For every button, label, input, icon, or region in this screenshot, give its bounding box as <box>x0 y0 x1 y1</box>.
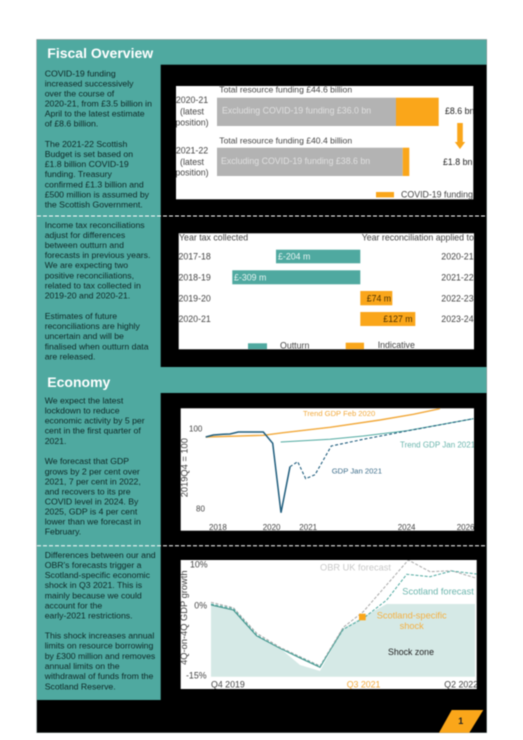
divider <box>37 215 485 217</box>
text block: income tax reconciliations: We are expecting two <box>45 260 128 270</box>
chart: income tax reconciliations: 2023-24 <box>441 314 474 324</box>
text block: GDP outlook: We forecast that GDP <box>45 456 129 466</box>
text block: COVID-19 funding: of £8.6 billion. <box>45 119 98 129</box>
text block: Scotland-specific shock: This shock increases annual <box>45 631 154 641</box>
text block: GDP outlook: grows by 2 per cent over <box>45 466 140 476</box>
arrow: down from 8.6 to 1.8 <box>455 123 465 149</box>
text block: GDP outlook: COVID level in 2024. By <box>45 496 139 506</box>
text block: GDP outlook: lockdown to reduce <box>45 405 120 415</box>
chart: income tax reconciliations: Indicative <box>378 340 415 350</box>
text block: COVID-19 funding: £500 million is assumed by <box>45 189 150 199</box>
chart: total resource funding bars: £1.8 bn <box>443 157 472 167</box>
chart: total resource funding bars: COVID-19 funding <box>401 190 473 200</box>
chart: total resource funding bars: position) <box>175 168 209 178</box>
text block: Scotland-specific shock: withdrawal of funds from the <box>44 671 154 681</box>
chart: total resource funding bars: 2020-21 <box>176 95 208 105</box>
chart: shock zone: Scotland-specific <box>377 610 447 620</box>
text block: income tax reconciliations: Estimates of future <box>45 311 117 321</box>
text block: COVID-19 funding: £1.8 billion COVID-19 <box>45 159 129 169</box>
chart: total resource funding bars: Excluding COVID-19 funding £36.0 bn <box>222 105 371 115</box>
chart: GDP lines: 80 <box>196 505 205 514</box>
chart: income tax reconciliations: £127 m <box>383 314 413 324</box>
chart: income tax reconciliations: 2021-22 <box>441 273 474 283</box>
text block: GDP outlook: 2025, GDP is 4 per cent <box>45 506 138 516</box>
text block: GDP outlook: February. <box>45 527 81 537</box>
chart: shock zone: 10% <box>190 559 208 569</box>
text block: income tax reconciliations: are released. <box>45 351 95 361</box>
chart: income tax reconciliations: Year reconciliation applied to <box>362 233 474 243</box>
chart: GDP lines: 2019Q4 = 100 <box>180 438 190 497</box>
chart: shock zone: Shock zone <box>388 647 434 657</box>
text block: Scotland-specific shock: by £300 million and removes <box>45 651 156 661</box>
chart: shock zone: -15% <box>186 670 207 680</box>
heading: Fiscal Overview: Fiscal Overview <box>47 45 153 61</box>
text block: Scotland-specific shock: limits on resource borrowing <box>45 641 154 651</box>
chart: income tax reconciliations <box>178 233 474 351</box>
text block: Scotland-specific shock: Differences between our and <box>45 550 156 560</box>
text block: COVID-19 funding: confirmed £1.3 billion and <box>45 179 144 189</box>
text block: Scotland-specific shock: shock in Q3 2021. This is <box>45 580 143 590</box>
text block: Scotland-specific shock: account for the <box>45 600 102 610</box>
chart: GDP lines: 2026 <box>457 523 475 532</box>
chart: income tax reconciliations: £-204 m <box>278 252 310 262</box>
chart: total resource funding bars: Total resource funding £40.4 billion <box>219 135 352 145</box>
text block: COVID-19 funding: COVID-19 funding <box>45 68 116 78</box>
text block: Scotland-specific shock: Scotland-specific economic <box>45 570 151 580</box>
chart: shock zone: shock <box>400 621 424 631</box>
chart: shock zone: Q3 2021 <box>347 680 381 690</box>
chart: income tax reconciliations: Outturn <box>280 341 309 351</box>
text block: Scotland-specific shock: Scotland Reserve. <box>45 681 116 691</box>
page number tab <box>439 710 483 733</box>
chart: total resource funding bars: position) <box>175 117 209 127</box>
chart: GDP lines: 2021 <box>299 523 318 532</box>
chart: total resource funding bars: £8.6 bn <box>445 106 474 116</box>
chart: total resource funding bars: 2021-22 <box>176 146 208 156</box>
text block: COVID-19 funding: funding. Treasury <box>45 169 112 179</box>
chart: GDP lines <box>180 408 476 532</box>
text block: Scotland-specific shock: early-2021 restrictions. <box>45 611 133 621</box>
text block: Scotland-specific shock <box>44 550 156 691</box>
text block: income tax reconciliations: forecasts in previous years. <box>45 250 150 260</box>
chart: shock zone: Q4 2019 <box>211 680 245 690</box>
chart: shock zone: 0% <box>194 601 207 611</box>
chart: GDP lines: Trend GDP Jan 2021 <box>400 441 476 450</box>
chart: shock zone: 4Q-on-4Q GDP growth <box>179 571 189 665</box>
text block: COVID-19 funding: increased successively <box>45 78 134 88</box>
chart: GDP lines: 2018 <box>209 523 227 532</box>
chart: shock zone: Q2 2022 <box>444 680 478 690</box>
text block: GDP outlook: 2021, 7 per cent in 2022, <box>45 476 141 486</box>
text block: income tax reconciliations: between outturn and <box>45 240 124 250</box>
text block: income tax reconciliations <box>45 220 150 361</box>
text block: Scotland-specific shock: mainly because we could <box>45 590 142 600</box>
text block: income tax reconciliations: positive reconciliations, <box>45 270 134 280</box>
text block: Scotland-specific shock: OBR's forecasts trigger a <box>45 560 142 570</box>
chart: GDP lines: GDP Jan 2021 <box>332 466 382 475</box>
chart: income tax reconciliations: 2019-20 <box>178 293 211 303</box>
chart: GDP lines: 2024 <box>398 523 416 532</box>
text block: COVID-19 funding: April to the latest estimate <box>45 109 145 119</box>
chart: income tax reconciliations: Year tax collected <box>179 233 248 243</box>
chart: GDP lines: 100 <box>189 425 203 434</box>
text block: COVID-19 funding <box>45 68 152 209</box>
text block: COVID-19 funding: over the course of <box>45 88 115 98</box>
chart: shock zone <box>179 559 478 690</box>
chart: income tax reconciliations: 2020-21 <box>178 314 211 324</box>
text block: income tax reconciliations: finalised when outturn data <box>45 341 149 351</box>
chart: shock zone: Scotland forecast <box>402 586 474 596</box>
text block: COVID-19 funding: The 2021-22 Scottish <box>45 139 127 149</box>
text block: GDP outlook: economic activity by 5 per <box>45 416 145 426</box>
chart: GDP lines: 2020 <box>263 523 281 532</box>
text block: COVID-19 funding: 2020-21, from £3.5 billion in <box>45 98 152 108</box>
chart: income tax reconciliations: £-309 m <box>234 273 266 283</box>
text block: COVID-19 funding: Budget is set based on <box>45 149 133 159</box>
text block: income tax reconciliations: adjust for differences <box>45 230 126 240</box>
text block: COVID-19 funding: the Scottish Government. <box>45 199 143 209</box>
chart: income tax reconciliations: £74 m <box>367 293 391 303</box>
chart: total resource funding bars: (latest <box>180 107 205 117</box>
chart: total resource funding bars <box>175 85 474 200</box>
chart: income tax reconciliations: 2022-23 <box>441 293 474 303</box>
text block: income tax reconciliations: related to tax collected in <box>45 281 141 291</box>
text block: income tax reconciliations: Income tax reconciliations <box>45 220 145 230</box>
divider <box>37 545 485 547</box>
chart: GDP lines: Trend GDP Feb 2020 <box>303 409 375 418</box>
chart: income tax reconciliations: 2018-19 <box>178 273 211 283</box>
text block: GDP outlook <box>45 395 145 537</box>
chart: total resource funding bars: (latest <box>180 157 205 167</box>
chart: income tax reconciliations: 2017-18 <box>178 252 211 262</box>
text block: income tax reconciliations: 2019-20 and 2020-21. <box>45 291 130 301</box>
text block: GDP outlook: We expect the latest <box>45 395 124 405</box>
text block: income tax reconciliations: uncertain and will be <box>45 331 124 341</box>
text block: GDP outlook: cent in the first quarter of <box>45 426 141 436</box>
text block: GDP outlook: 2021. <box>45 436 66 446</box>
band and heading: Economy: Economy <box>47 374 111 390</box>
text block: GDP outlook: lower than we forecast in <box>45 516 141 526</box>
text block: GDP outlook: and recovers to its pre <box>45 486 131 496</box>
chart: total resource funding bars: Excluding COVID-19 funding £38.6 bn <box>221 156 370 166</box>
chart: shock zone: OBR UK forecast <box>320 563 391 573</box>
chart: total resource funding bars: Total resource funding £44.6 billion <box>219 85 352 95</box>
page number tab: 1 <box>458 716 463 726</box>
text block: income tax reconciliations: reconciliations are highly <box>45 321 140 331</box>
chart: income tax reconciliations: 2020-21 <box>441 252 474 262</box>
text block: Scotland-specific shock: annual limits on the <box>45 661 120 671</box>
